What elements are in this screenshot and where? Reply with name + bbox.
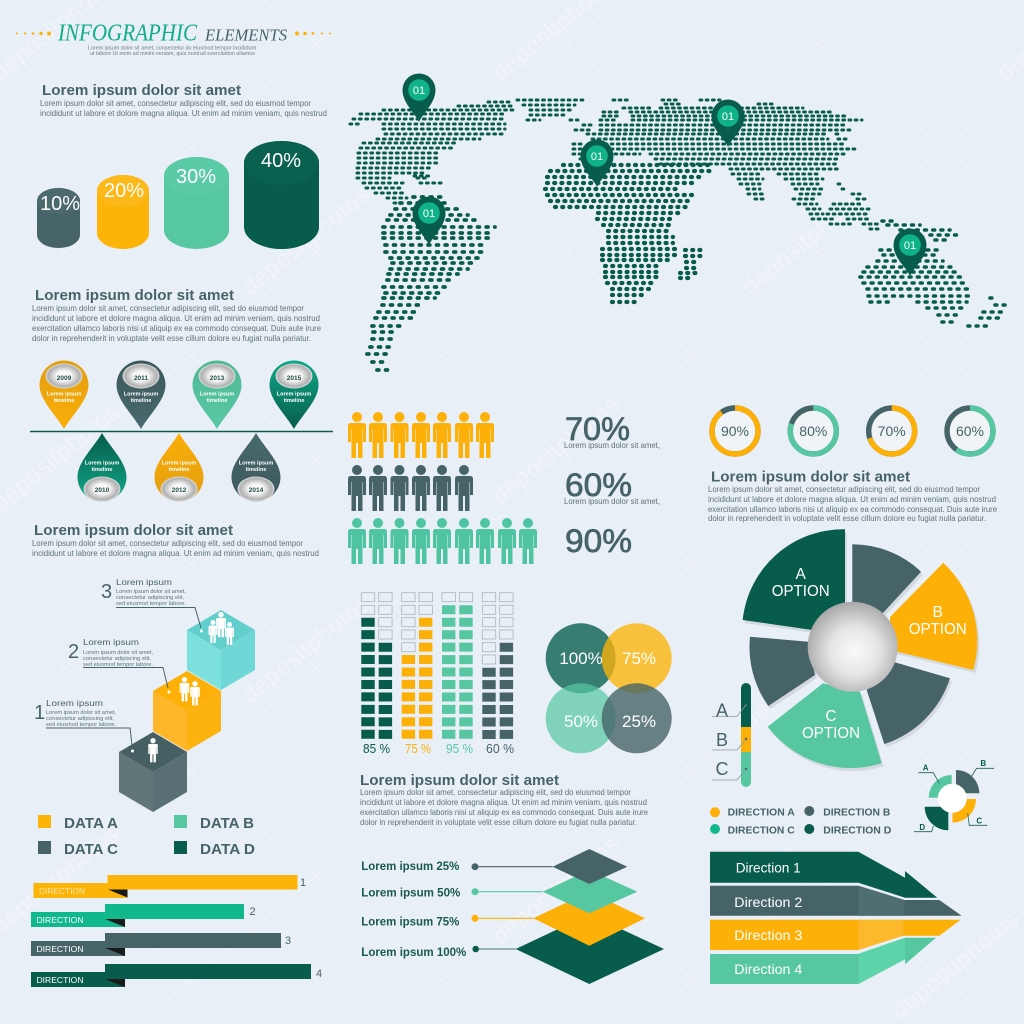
- text block: middle column: Lorem ipsum dolor sit amet: [360, 772, 559, 789]
- legend: data: [38, 815, 255, 858]
- drop 2014: Lorem ipsum: [239, 460, 273, 466]
- title: ut labore Ut enim ad minim veniam, quis nostrud exercitation ullamus: [90, 51, 256, 57]
- map pin: south america: 01: [423, 208, 435, 220]
- column 75%: [405, 618, 431, 756]
- diamond layer 50%: [361, 870, 637, 913]
- step label 2: 2: [68, 641, 79, 663]
- ribbon 1: 1: [300, 877, 306, 889]
- ribbon 2: DIRECTION: [36, 916, 84, 925]
- text block: timeline intro: dolor in reprehenderit in voluptate velit esse cillum dolore eu fugiat nulla pariatur.: [32, 333, 311, 343]
- diamond layer 100%: [361, 914, 664, 984]
- arrow band 2: [710, 886, 962, 916]
- legend: directions: DIRECTION C: [728, 825, 795, 836]
- ribbon 4: [31, 964, 322, 987]
- drop 2010: Lorem ipsum: [85, 460, 119, 466]
- pie sectors: [743, 529, 977, 768]
- chart: overlapping circles: [546, 623, 672, 753]
- pin 2009: timeline: [54, 398, 74, 404]
- label: C option: [802, 708, 860, 742]
- chart: block columns: [361, 593, 514, 756]
- pin 2013: 2013: [210, 375, 225, 382]
- watermark: depositphotos: [237, 182, 375, 301]
- ring 70%: [866, 405, 917, 457]
- column 95%: [446, 605, 473, 756]
- step label 3: [101, 577, 203, 632]
- ring 80%: [788, 405, 839, 457]
- step label 2: Lorem ipsum: [83, 637, 139, 647]
- watermark: depositphotos: [737, 616, 875, 735]
- step label 3: Lorem ipsum dolor sit amet,: [116, 589, 186, 595]
- pin 2011: [116, 360, 166, 429]
- drop 2014: 2014: [249, 487, 264, 494]
- step label 3: Lorem ipsum: [116, 577, 172, 587]
- text block: right column: Lorem ipsum dolor sit amet, consectetur adipiscing elit, sed do eiusmod tempor: [708, 484, 980, 494]
- step label 3: sed eiusmod tempor labore.: [116, 601, 186, 607]
- ribbon 3: [31, 933, 291, 956]
- label: B option: B: [933, 604, 943, 621]
- step label 1: [34, 698, 134, 752]
- drop 2010: 2010: [95, 487, 110, 494]
- ring 90%: 90%: [721, 423, 749, 439]
- text block: below timeline: Lorem ipsum dolor sit amet: [34, 522, 233, 539]
- text block: below timeline: [32, 522, 319, 558]
- vertical scale bar: A: [716, 700, 728, 720]
- stat: percentages: Lorem ipsum dolor sit amet,: [564, 440, 660, 450]
- pictogram: people rows: [348, 412, 537, 564]
- drop 2010: timeline: [92, 467, 112, 473]
- diamond layer 25%: [361, 849, 627, 884]
- ribbon 4: DIRECTION: [36, 976, 84, 985]
- stat: percentages: 60%: [565, 467, 632, 503]
- text block: cylinders intro: Lorem ipsum dolor sit amet: [42, 82, 241, 99]
- map pin: africa: 01: [591, 151, 603, 163]
- step label 1: consectetur adipiscing elit,: [46, 716, 114, 722]
- pin 2015: 2015: [287, 375, 302, 382]
- pin 2009: [40, 360, 88, 429]
- step label 2: consectetur adipiscing elit,: [83, 656, 151, 662]
- text block: timeline intro: [32, 287, 321, 343]
- diamond layer 50%: Lorem ipsum 50%: [361, 886, 461, 900]
- cylinder 40%: [244, 141, 319, 249]
- pin 2015: [270, 360, 318, 429]
- map: australia and oceania: [860, 221, 1008, 326]
- drop 2010: [78, 433, 126, 502]
- step label 1: Lorem ipsum: [46, 698, 103, 708]
- ribbon 2: [31, 904, 256, 927]
- drop 2014: [232, 433, 280, 502]
- chart: overlapping circles: 25%: [622, 712, 656, 731]
- map pin: north america: 01: [413, 85, 425, 97]
- label: C option: OPTION: [802, 725, 860, 742]
- cube 2: [153, 671, 221, 751]
- title: [16, 21, 331, 57]
- legend: data: DATA A: [64, 816, 119, 832]
- pin 2011: timeline: [131, 398, 151, 404]
- map pin: north america: [402, 74, 436, 122]
- chart: overlapping circles: 75%: [622, 649, 656, 668]
- arrow band 1: [710, 852, 937, 898]
- cylinder 30%: 30%: [176, 166, 216, 188]
- legend: directions: DIRECTION A: [728, 807, 795, 818]
- map: north america and greenland: [350, 100, 587, 203]
- pin 2011: Lorem ipsum: [124, 392, 158, 398]
- map: eurasia: [573, 100, 882, 229]
- step label 3: 3: [101, 581, 112, 603]
- stat: percentages: Lorem ipsum dolor sit amet,: [564, 496, 660, 506]
- text block: middle column: dolor in reprehenderit in voluptate velit esse cillum dolore eu fugiat nulla pariatur.: [360, 817, 637, 827]
- legend: directions: DIRECTION B: [823, 807, 890, 818]
- text block: timeline intro: exercitation ullamco laboris nisi ut aliquip ex ea commodo consequat. Duis aute irure: [32, 323, 321, 333]
- ribbon 4: 4: [316, 968, 322, 980]
- watermark: depositphotos: [487, 391, 625, 510]
- pie center sphere: [808, 602, 898, 692]
- step label 2: [68, 637, 170, 694]
- people row: slate: [348, 465, 473, 511]
- title: ELEMENTS: [204, 26, 287, 44]
- watermark: depositphotos: [887, 906, 1024, 1024]
- isometric cube steps: [34, 577, 255, 812]
- column 85%: 85 %: [363, 742, 390, 756]
- column 60%: [486, 643, 514, 756]
- label: A option: OPTION: [772, 583, 830, 600]
- map pin: australia: 01: [904, 240, 916, 252]
- chart: small donut: [914, 759, 994, 832]
- chart: cylinders: [37, 141, 319, 249]
- chart: overlapping circles: 50%: [564, 712, 598, 731]
- text block: below timeline: incididunt ut labore et dolore magna aliqua. Ut enim ad minim veniam, quis nostrud: [32, 548, 319, 558]
- ring 60%: [944, 405, 996, 457]
- diamond layer 75%: [361, 892, 645, 946]
- diamond layer 75%: Lorem ipsum 75%: [361, 915, 460, 929]
- column 95%: 95 %: [446, 742, 473, 756]
- arrow band 3: Direction 3: [734, 927, 803, 943]
- arrow band 2: Direction 2: [734, 894, 803, 910]
- drop 2012: Lorem ipsum: [162, 460, 196, 466]
- legend: data: DATA B: [200, 816, 254, 832]
- text block: right column: Lorem ipsum dolor sit amet: [711, 468, 910, 486]
- step label 2: sed eiusmod tempor labore.: [83, 662, 153, 668]
- arrow band 3: [710, 920, 961, 950]
- ring 90%: [709, 405, 761, 457]
- ring 80%: 80%: [799, 423, 827, 439]
- chart: overlapping circles: 100%: [559, 649, 603, 668]
- pin 2009: Lorem ipsum: [47, 392, 81, 398]
- ring 60%: 60%: [956, 423, 984, 439]
- drop 2012: [154, 433, 204, 502]
- label: B option: [909, 604, 967, 638]
- legend: data: DATA D: [200, 842, 255, 858]
- watermark: depositphotos: [737, 182, 875, 301]
- title: INFOGRAPHIC: [57, 21, 198, 47]
- text block: cylinders intro: [40, 82, 327, 118]
- dotted world map: [350, 74, 1008, 370]
- text block: right column: dolor in reprehenderit in voluptate velit esse cillum dolore eu fugiat nulla pariatur.: [708, 513, 986, 523]
- text block: middle column: Lorem ipsum dolor sit amet, consectetur adipiscing elit, sed do eiusmod tempor: [360, 787, 631, 797]
- ribbon 1: [34, 875, 306, 898]
- text block: right column: incididunt ut labore et dolore magna aliqua. Ut enim ad minim veniam, quis nostrud: [708, 494, 996, 504]
- ribbon 3: 3: [285, 935, 291, 947]
- step label 1: 1: [34, 702, 45, 724]
- chart: layered diamonds: [361, 849, 664, 984]
- pin 2013: timeline: [207, 398, 227, 404]
- people row: green: [348, 518, 537, 564]
- ribbon 2: 2: [250, 906, 256, 918]
- stat: percentages: 70%: [565, 411, 630, 447]
- drop 2012: 2012: [172, 487, 187, 494]
- step label 3: consectetur adipiscing elit,: [116, 595, 184, 601]
- watermark: depositphotos: [237, 590, 375, 709]
- stat: percentages: 90%: [565, 523, 632, 559]
- cylinder 30%: [164, 157, 229, 249]
- text block: middle column: [360, 772, 648, 827]
- pin 2013: Lorem ipsum: [200, 392, 234, 398]
- column 75%: 75 %: [405, 742, 431, 756]
- text block: right column: [708, 468, 997, 523]
- cylinder 20%: 20%: [104, 180, 144, 202]
- text block: cylinders intro: incididunt ut labore et dolore magna aliqua. Ut enim ad minim veniam, quis nostrud: [40, 108, 327, 118]
- arrow band 4: [710, 938, 936, 984]
- diamond layer 100%: Lorem ipsum 100%: [361, 945, 467, 959]
- ribbon bars: [31, 875, 322, 987]
- map pin: africa: [580, 140, 614, 187]
- arrow band 4: Direction 4: [734, 961, 803, 977]
- vertical scale bar: B: [716, 730, 728, 750]
- column 85%: [363, 618, 390, 756]
- chart: small donut: D: [919, 823, 925, 832]
- cube 3: [187, 610, 255, 690]
- chart: direction arrows: [710, 852, 962, 984]
- drop 2012: timeline: [169, 467, 189, 473]
- chart: small donut: C: [976, 816, 982, 826]
- label: A option: [772, 566, 830, 600]
- map pin: asia: 01: [722, 111, 734, 123]
- vertical scale bar: C: [716, 759, 728, 779]
- pin 2009: 2009: [57, 375, 72, 382]
- step label 1: sed eiusmod tempor labore.: [46, 722, 116, 728]
- cylinder 20%: [97, 175, 149, 249]
- text block: right column: exercitation ullamco laboris nisi ut aliquip ex ea commodo consequat. Duis aute irure: [708, 504, 997, 514]
- title: Lorem ipsum dolor sit amet, consectetur do eiusmod tempor incididunt: [88, 46, 257, 52]
- map: africa and arabia: [545, 165, 712, 302]
- chart: exploded pie: [743, 529, 977, 768]
- column 60%: 60 %: [486, 742, 514, 756]
- step label 1: Lorem ipsum dolor sit amet,: [46, 710, 116, 716]
- map: south america: [367, 197, 495, 370]
- text block: timeline intro: Lorem ipsum dolor sit amet: [35, 287, 234, 304]
- text block: middle column: exercitation ullamco laboris nisi ut aliquip ex ea commodo consequat. Duis aute irure: [360, 807, 648, 817]
- legend: directions: DIRECTION D: [823, 825, 891, 836]
- pin 2015: Lorem ipsum: [277, 392, 311, 398]
- chart: progress rings: [709, 405, 996, 457]
- vertical scale bar: [712, 683, 751, 787]
- ribbon 1: DIRECTION: [39, 887, 85, 896]
- ribbon 3: DIRECTION: [36, 945, 84, 954]
- label: A option: A: [796, 566, 807, 583]
- map pin: australia: [894, 228, 926, 276]
- step label 2: Lorem ipsum dolor sit amet,: [83, 650, 153, 656]
- empty block outlines: [361, 593, 513, 664]
- text block: cylinders intro: Lorem ipsum dolor sit amet, consectetur adipiscing elit, sed do eiusmod tempor: [40, 98, 311, 108]
- text block: middle column: incididunt ut labore et dolore magna aliqua. Ut enim ad minim veniam, quis nostrud: [360, 797, 647, 807]
- map pin: asia: [712, 100, 744, 147]
- legend: directions: [710, 806, 891, 836]
- map pin: south america: [412, 196, 446, 245]
- chart: small donut: B: [980, 759, 986, 768]
- stat: percentages: [564, 411, 660, 559]
- timeline: [30, 360, 333, 502]
- ring 70%: 70%: [878, 423, 906, 439]
- legend: data: DATA C: [64, 842, 119, 858]
- pin 2013: [192, 360, 242, 429]
- text block: timeline intro: incididunt ut labore et dolore magna aliqua. Ut enim ad minim veniam, quis nostrud: [32, 313, 320, 323]
- pin 2011: 2011: [134, 375, 148, 382]
- people row: orange: [348, 412, 494, 458]
- watermark: depositphotos: [487, 831, 625, 950]
- label: C option: C: [825, 708, 837, 725]
- drop 2014: timeline: [246, 467, 266, 473]
- arrow band 1: Direction 1: [736, 860, 801, 876]
- cube 1: [119, 732, 187, 812]
- cylinder 10%: [37, 188, 80, 248]
- label: B option: OPTION: [909, 621, 967, 638]
- text block: timeline intro: Lorem ipsum dolor sit amet, consectetur adipiscing elit, sed do eiusmod tempor: [32, 303, 304, 313]
- cylinder 40%: 40%: [261, 150, 301, 172]
- pin 2015: timeline: [284, 398, 304, 404]
- diamond layer 25%: Lorem ipsum 25%: [361, 859, 460, 873]
- cylinder 10%: 10%: [40, 193, 80, 215]
- chart: small donut: A: [923, 764, 929, 773]
- text block: below timeline: Lorem ipsum dolor sit amet, consectetur adipiscing elit, sed do eiusmod tempor: [32, 538, 303, 548]
